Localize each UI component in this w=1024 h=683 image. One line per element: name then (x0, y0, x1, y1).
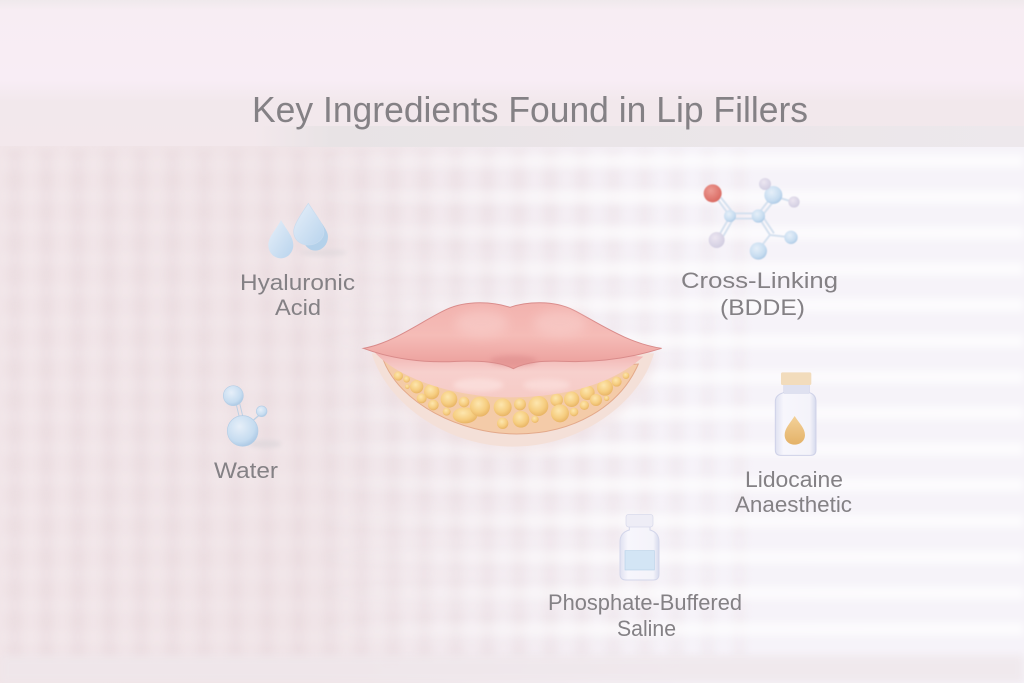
label: lidocaine anaesthetic: Lidocaine (745, 467, 843, 492)
label: hyaluronic acid: Hyaluronic (240, 270, 355, 295)
label: hyaluronic acid: Acid (275, 295, 321, 320)
label: hyaluronic acid (240, 270, 355, 320)
label: lidocaine anaesthetic (735, 467, 852, 517)
icon: hyaluronic acid droplets (268, 203, 347, 258)
label: phosphate-buffered saline: Phosphate-Buffered (548, 590, 742, 615)
icon: saline bottle (620, 514, 659, 580)
label: cross-linking (BDDE) (681, 268, 838, 320)
title shadow band (255, 126, 1024, 147)
lips soft glow (367, 350, 658, 453)
title: Key Ingredients Found in Lip Fillers (252, 89, 808, 130)
label: phosphate-buffered saline: Saline (617, 616, 676, 641)
lips illustration (363, 303, 662, 453)
icon: cross-linking molecule (704, 178, 800, 260)
lower lip (375, 347, 643, 397)
label: cross-linking (BDDE): (BDDE) (720, 295, 805, 320)
fat globules (394, 371, 629, 429)
outer halo (372, 353, 654, 447)
label: lidocaine anaesthetic: Anaesthetic (735, 492, 852, 517)
label: cross-linking (BDDE): Cross-Linking (681, 268, 838, 293)
label: phosphate-buffered saline (548, 590, 742, 641)
label: water: Water (214, 458, 278, 483)
icon: water molecule (223, 386, 282, 448)
icon: lidocaine vial (775, 372, 816, 455)
upper lip (363, 303, 662, 369)
fat pouch (383, 360, 638, 434)
